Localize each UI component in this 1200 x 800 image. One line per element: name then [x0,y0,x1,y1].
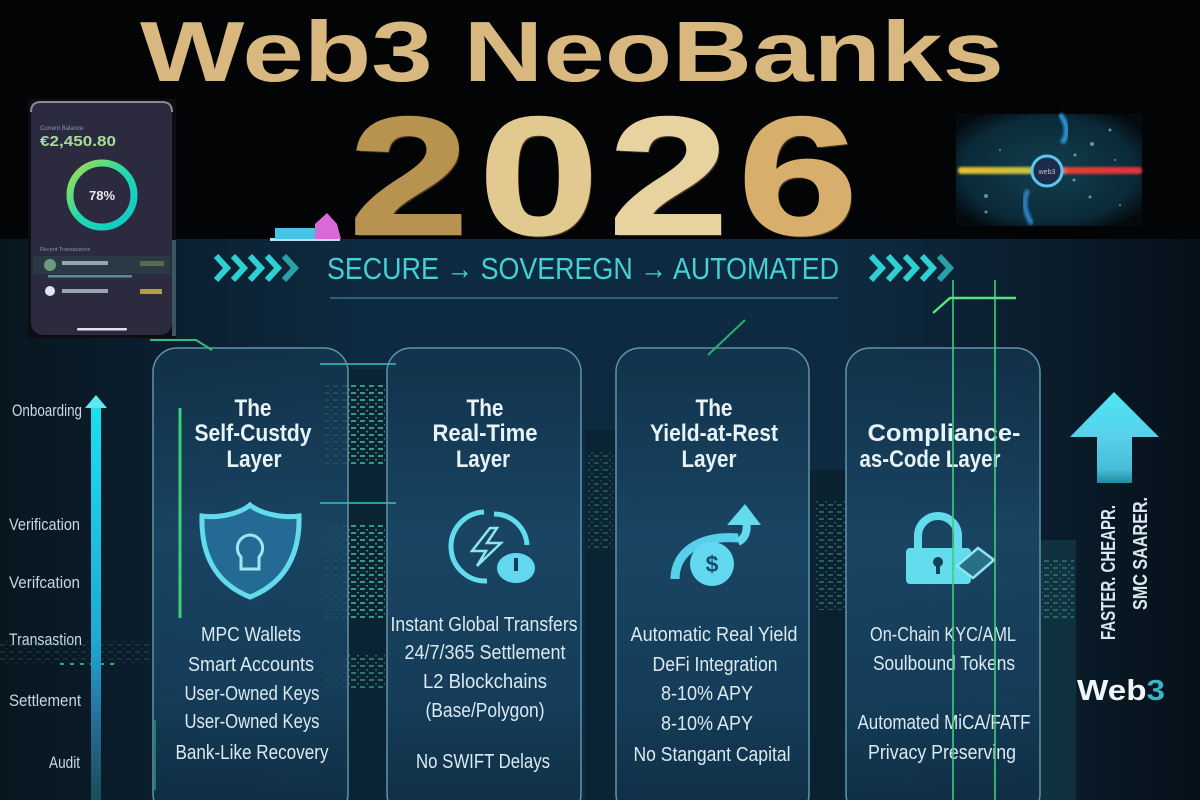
icon: shield keyhole [202,505,299,597]
feature list: 8-10% APY [661,683,753,705]
timeline labels: Audit [49,753,80,772]
progress ring [70,163,134,227]
feature list: On-Chain KYC/AML [870,624,1016,646]
icon: lightning clock [451,512,535,583]
heading: Layer [456,446,510,473]
feature list: User-Owned Keys [184,683,320,705]
feature list: Privacy Preserving [868,742,1016,764]
year 2026: 0 [479,82,599,270]
year 2026: 2 [609,82,728,270]
balance amount: €2,450.80 [40,133,116,150]
heading: Self-Custdy [194,420,312,447]
right chevrons [871,256,950,280]
feature list: 8-10% APY [661,713,753,735]
timeline labels: Settlement [9,691,81,710]
heading [860,420,1020,473]
timeline labels: Verification [9,515,80,534]
feature list: DeFi Integration [652,654,778,676]
year 2026: 2 [349,82,469,270]
feature list: 24/7/365 Settlement [404,642,566,664]
panel: yield-at-rest layer [616,348,809,800]
heading: The [696,395,732,422]
heading [650,395,778,473]
timeline labels: Transastion [9,630,82,649]
transaction row 2 [45,286,162,296]
feature list: (Base/Polygon) [426,700,544,722]
feature list: Automatic Real Yield [630,624,798,646]
transaction row 1 [33,256,171,278]
feature list: User-Owned Keys [184,711,320,733]
feature list: L2 Blockchains [423,671,547,693]
neon skyline accent [270,213,341,241]
right large up arrow [1070,392,1159,483]
timeline labels: Onboarding [12,401,82,420]
banner: secure, sovereign, automated [216,251,950,298]
heading: as-Code Layer [860,446,1000,473]
feature list: MPC Wallets [201,624,301,646]
network image: web3 [1038,169,1055,176]
left chevrons [216,256,295,280]
banner text: SECURE → SOVEREGN → AUTOMATED [327,251,839,286]
feature list: Smart Accounts [188,654,314,676]
feature list [176,624,328,764]
vertical tagline: SMC SAARER. [1130,497,1152,610]
heading [432,395,538,473]
title: Web3 NeoBanks [140,5,1004,100]
feature list: Bank-Like Recovery [176,742,328,764]
panel: real-time layer [387,348,581,800]
progress ring: 78% [89,188,115,203]
heading [194,395,312,473]
feature list: No SWIFT Delays [416,751,550,773]
network image [956,114,1142,226]
feature list: Instant Global Transfers [390,614,578,636]
feature list: No Stangant Capital [634,744,790,766]
feature list [858,624,1030,764]
heading: Real-Time [432,420,538,447]
feature list: Automated MiCA/FATF [858,712,1030,734]
panel: compliance-as-code layer [846,348,1040,800]
vertical tagline [1098,497,1152,640]
heading: Layer [682,446,736,473]
heading: Yield-at-Rest [650,420,778,447]
feature list: Soulbound Tokens [873,653,1015,675]
feature list [630,624,798,766]
year 2026: 2026 [351,84,860,272]
icon: coin with rising arrow [675,504,761,586]
transactions heading: Recent Transactions [40,247,90,253]
phone mockup [28,99,176,338]
timeline labels: Verifcation [9,573,80,592]
heading: Layer [226,446,282,473]
timeline arrow [85,395,107,800]
feature list [390,614,578,773]
left timeline [9,395,107,800]
circuit lines [60,280,1016,800]
vertical tagline: FASTER. CHEAPR. [1098,505,1120,640]
heading: Compliance- [868,420,1020,447]
balance label: Current Balance [40,126,84,132]
year 2026: 6 [738,82,858,270]
heading: The [234,395,272,422]
icon: coin with rising arrow: $ [706,551,719,577]
icon: padlock with token [906,516,994,584]
home indicator [77,328,127,330]
timeline labels [9,401,82,772]
heading: The [466,395,504,422]
panel: self-custody layer [153,348,348,800]
web3 logo: Web 3 [1077,675,1165,707]
